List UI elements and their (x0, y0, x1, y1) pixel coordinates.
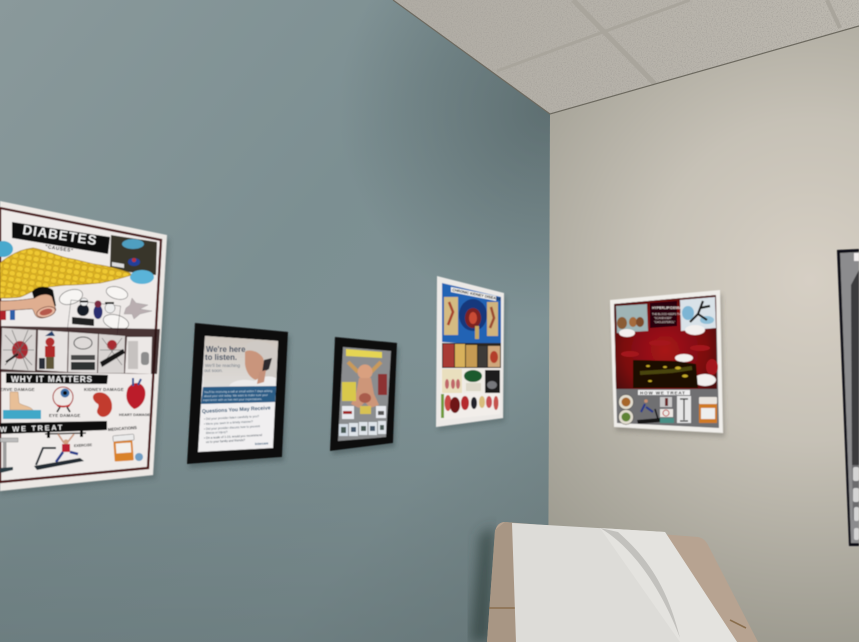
info card right (376, 406, 386, 418)
icon: kidney (93, 392, 112, 417)
poster: diabetes (0, 201, 170, 495)
questions list: • Did your provider discuss how to prevent (204, 424, 260, 431)
questions list: Questions You May Receive (202, 405, 271, 415)
weight scale card (677, 396, 691, 423)
how we treat banner: W WE TREAT (0, 423, 64, 434)
info card left (342, 406, 354, 419)
photo of woman on phone (203, 336, 278, 387)
right wall (548, 26, 859, 642)
icon: pill bottle (113, 434, 134, 462)
icon: duodenum tube (0, 287, 56, 320)
logo badge (135, 453, 143, 461)
title block (650, 301, 682, 328)
right comic panel (680, 297, 716, 331)
questions list: • On a scale of 1-10, would you recommend (204, 433, 263, 440)
left story panel (444, 297, 458, 335)
exercise label: EXERCISE (74, 443, 93, 448)
poster: chronic kidney disease (436, 276, 506, 431)
diabetes title banner (12, 222, 110, 254)
diabetes title banner: DIABETES (22, 222, 98, 248)
doctor with kidney (459, 299, 487, 339)
red side panel (378, 374, 387, 395)
paper sheet (512, 523, 737, 642)
exam table shadow on wall (470, 526, 494, 642)
icon: barbell and runner on treadmill (34, 430, 86, 470)
red top section (614, 295, 717, 389)
small note cards (853, 467, 859, 540)
burst callout (124, 298, 152, 319)
treadmill with runner (637, 399, 660, 424)
exam table (487, 522, 758, 642)
questions list (202, 405, 271, 446)
icon: foot (3, 392, 41, 419)
title block: "SCAVENGER" (654, 316, 672, 320)
yellow title (346, 349, 382, 358)
how we treat banner (0, 421, 107, 434)
third row panels (442, 369, 500, 393)
body illustration (348, 362, 381, 414)
right story panel (487, 302, 498, 336)
heart damage label: HEART DAMAGE (119, 413, 150, 417)
bottom row organs (441, 394, 498, 418)
blue top section (442, 283, 501, 346)
questions list: us to your family and friends? (206, 438, 246, 444)
icon: pancreas (0, 248, 131, 298)
yellow side panel (342, 382, 356, 401)
kidney damage label: KIDNEY DAMAGE (84, 387, 124, 392)
poster: hyperlipidemia (610, 290, 725, 437)
blue message band: about your visit today. We want to make sure your (204, 393, 268, 398)
medication bottle (699, 397, 717, 423)
how we treat banner: HOW WE TREAT (640, 390, 686, 396)
blue speech bubble (130, 270, 154, 284)
blue message band (201, 386, 276, 404)
heading: we're here to listen: out soon. (204, 368, 223, 373)
questions list: Intercare (255, 441, 269, 446)
left wall (0, 0, 550, 642)
blue message band: experience with us has met your expectations. (203, 397, 262, 402)
top comic panel (110, 235, 157, 275)
heading: we're here to listen: We'll be reaching (205, 363, 240, 368)
questions list: • Were you seen in a timely manner? (204, 419, 253, 426)
eye damage label: EYE DAMAGE (49, 413, 81, 418)
partially visible framed poster (837, 249, 859, 546)
comic strip row: causes (0, 326, 160, 374)
nerve damage label: ERVE DAMAGE (0, 387, 35, 392)
no smoking and wine cards (660, 397, 674, 423)
medications label: MEDICATIONS (108, 425, 137, 432)
title block: HYPERLIPIDEMIA (652, 306, 682, 310)
blue message band: You'll be receiving a call or email within 7 days asking (204, 389, 273, 394)
speech clouds (619, 325, 716, 386)
food plates (618, 394, 634, 424)
speech bubbles and cell characters (57, 284, 130, 336)
title block: "CHOLESTEROL" (654, 320, 675, 324)
second row panels (442, 343, 501, 368)
left comic panel (616, 304, 648, 333)
questions list: illness or injury? (206, 430, 228, 435)
blue speech bubble top left (0, 241, 13, 257)
title banner: CHRONIC KIDNEY DISEASE (452, 288, 502, 301)
bottom row of cards (339, 421, 386, 436)
title block: THE BLOOD KEEPS THE (652, 312, 682, 316)
framed poster: we're here to listen (187, 323, 290, 468)
questions list: • Did your provider listen carefully to you? (204, 414, 260, 421)
causes subtitle: "CAUSES" (45, 244, 74, 254)
icon: eye (53, 387, 73, 412)
blood cells (621, 340, 718, 375)
ceiling tiles and grid (393, 0, 859, 114)
why it matters banner: WHY IT MATTERS (11, 374, 93, 384)
icon: weight scale (0, 438, 18, 473)
heading: we're here to listen (204, 345, 246, 373)
heading: we're here to listen: to listen. (205, 353, 237, 362)
dark artery inset (633, 360, 698, 388)
heading: we're here to listen: We're here (206, 345, 246, 354)
icon: heart (126, 378, 145, 409)
framed poster: anatomy (330, 337, 399, 455)
